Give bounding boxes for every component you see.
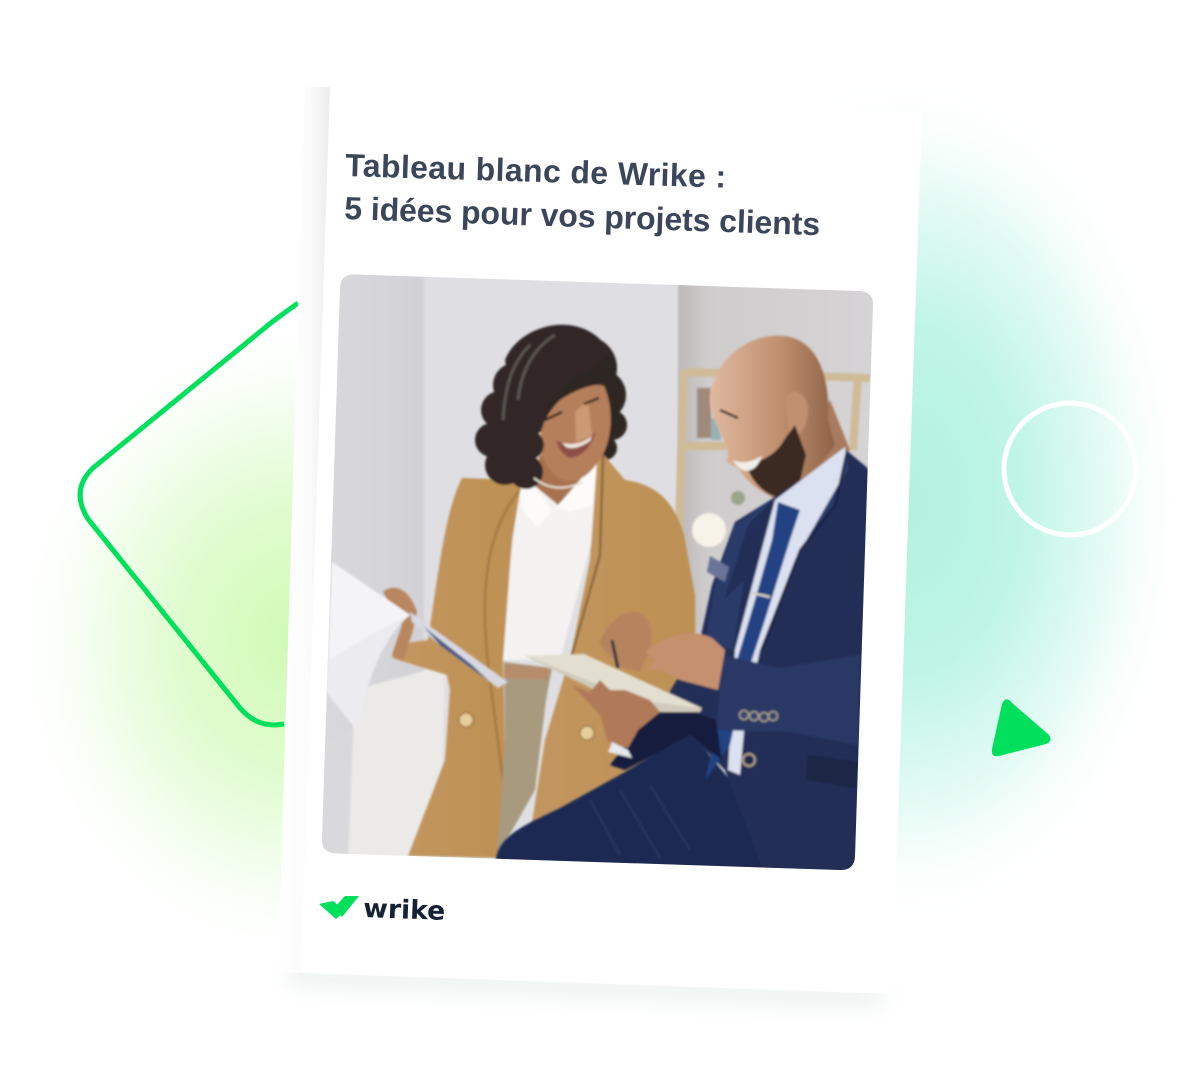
blazer buttons bbox=[459, 713, 473, 727]
blazer bbox=[392, 478, 522, 858]
man's pointing hand bbox=[645, 633, 725, 690]
paper sheets bbox=[327, 614, 410, 726]
man's holding hand bbox=[572, 680, 660, 748]
man's neck bbox=[772, 400, 850, 510]
man's ear bbox=[788, 392, 808, 434]
book spine bbox=[278, 87, 330, 973]
woman bbox=[392, 325, 695, 858]
wrike check mark bbox=[319, 896, 359, 919]
woman's smile bbox=[556, 432, 596, 458]
jacket sleeve bbox=[716, 655, 860, 745]
sleeve buttons bbox=[740, 710, 778, 722]
wrike logo bbox=[319, 894, 446, 927]
woman's hair back bbox=[538, 340, 629, 461]
infographic: ebook cover mockup bbox=[65, 87, 1144, 1008]
woman's pen hand bbox=[600, 612, 652, 672]
notebook papers bbox=[326, 562, 508, 732]
woman's face bbox=[540, 385, 611, 481]
woman's shirt bbox=[503, 455, 598, 660]
man's jacket bbox=[668, 450, 868, 870]
pocket square bbox=[707, 556, 729, 582]
bookshelf bbox=[674, 367, 871, 548]
man's beard bbox=[745, 425, 806, 498]
title line 2: 5 idées pour vos projets clients bbox=[344, 190, 821, 242]
office background bbox=[320, 270, 880, 880]
jacket lapels bbox=[706, 497, 775, 650]
photo: two colleagues reviewing a tablet bbox=[320, 270, 880, 880]
outline circle bbox=[1004, 403, 1136, 535]
book cover page bbox=[278, 86, 922, 994]
man's head bbox=[710, 336, 835, 498]
man bbox=[496, 336, 870, 880]
book bbox=[278, 86, 922, 994]
woman's hair front bbox=[475, 325, 610, 489]
book shadow bbox=[290, 968, 880, 1002]
title line 1: Tableau blanc de Wrike : bbox=[345, 147, 727, 195]
man's trousers bbox=[496, 732, 770, 880]
outline diamond shape bbox=[80, 303, 298, 725]
woman's left hand bbox=[383, 588, 417, 660]
notebook pages bbox=[410, 612, 508, 688]
man's smile bbox=[733, 456, 762, 471]
jacket button bbox=[743, 754, 755, 766]
trousers and belt bbox=[497, 662, 552, 857]
green triangle bbox=[992, 699, 1051, 756]
wrike wordmark: wrike bbox=[363, 894, 446, 927]
woman's neck bbox=[534, 453, 582, 506]
jacket pocket bbox=[806, 755, 858, 788]
title bbox=[344, 147, 821, 242]
lower left arm shadow bbox=[610, 712, 722, 771]
background glow: green bbox=[5, 310, 585, 970]
man's shirt bbox=[728, 447, 848, 775]
necklace bbox=[534, 478, 583, 488]
tablet bbox=[525, 654, 702, 712]
man's tie bbox=[705, 502, 800, 780]
background glow: mint bbox=[620, 70, 1190, 930]
